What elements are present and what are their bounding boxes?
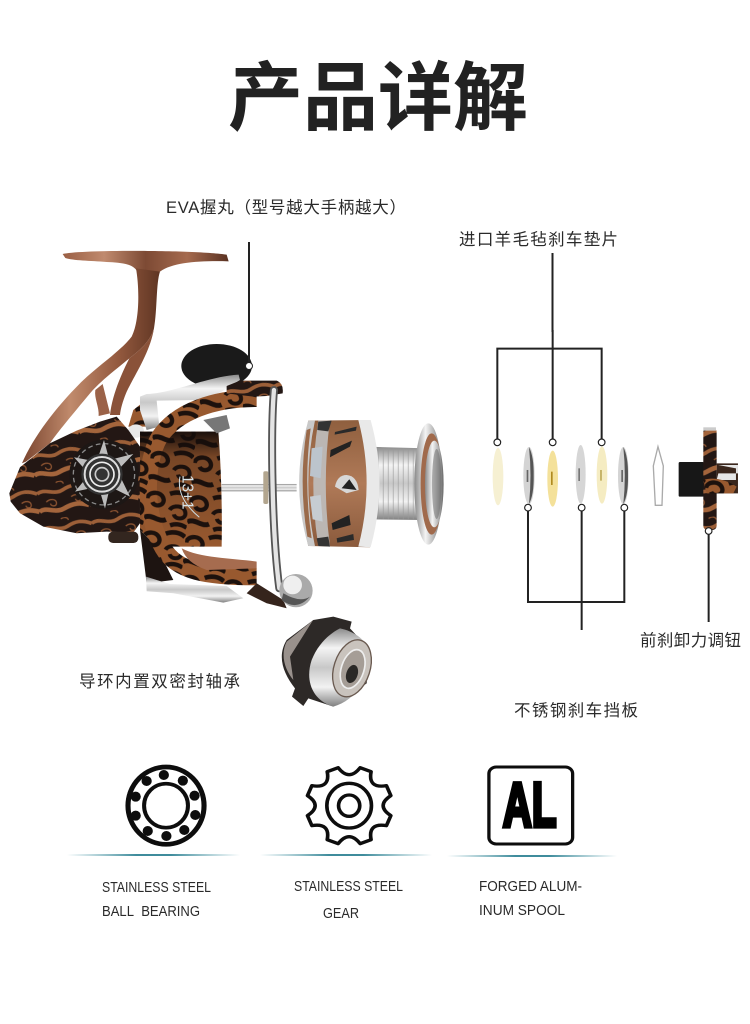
- spool neck: [367, 447, 423, 520]
- divider 3: [447, 855, 617, 857]
- capacity marking: [179, 475, 199, 517]
- caption: ball bearing: STAINLESS STEEL: [102, 879, 211, 896]
- rotor arm patterned: [148, 398, 257, 577]
- steel washer 3: [618, 447, 629, 504]
- caption: gear: [294, 878, 403, 922]
- slot: [337, 534, 354, 543]
- fishing reel illustration: [9, 251, 444, 608]
- rotor arm silver bottom: [146, 577, 243, 603]
- bearing race: [309, 628, 371, 707]
- divider 2: [260, 854, 432, 856]
- reel stem and outer arm: [22, 268, 160, 463]
- bearing close-up: [282, 617, 378, 707]
- flange dark core: [432, 449, 441, 519]
- silver right shoulder: [358, 420, 379, 547]
- felt pad 3: [597, 446, 607, 504]
- caption: gear: GEAR: [323, 905, 359, 922]
- label: EVA grip: EVA握丸（型号越大手柄越大）: [166, 198, 406, 217]
- label: drag knob: 前刹卸力调钮: [640, 631, 741, 650]
- caption: ball bearing: BALL BEARING: [102, 903, 200, 920]
- label: wool felt brake pad: 进口羊毛毡刹车垫片: [459, 230, 618, 249]
- bail roller ball: [279, 574, 313, 607]
- bottom screw: [108, 532, 138, 543]
- icon: gear: [307, 768, 391, 844]
- caption: gear: STAINLESS STEEL: [294, 878, 403, 895]
- slot: [330, 441, 352, 457]
- bearing hole: [344, 663, 360, 685]
- flange outer: [414, 423, 442, 545]
- spring clip: [653, 447, 663, 505]
- brake washers and drag knob: [493, 330, 738, 630]
- felt pad 1: [493, 448, 503, 505]
- caption: spool: INUM SPOOL: [479, 902, 565, 919]
- grip knob: [181, 344, 252, 388]
- slot: [332, 515, 351, 530]
- main shaft: [222, 484, 297, 491]
- cup shadow: [140, 432, 222, 547]
- caption: spool: [479, 878, 582, 919]
- leader line: felt pad top: [552, 253, 554, 332]
- silver rim left: [299, 421, 315, 546]
- reel body: [9, 417, 140, 533]
- icon: aluminium: [489, 767, 573, 844]
- divider 1: [67, 854, 240, 856]
- bronze band under rim: [303, 428, 312, 538]
- top notch: [317, 421, 332, 431]
- neck ribs: [378, 448, 413, 519]
- leader line: EVA grip: [246, 242, 252, 370]
- rotor cup: [140, 432, 222, 547]
- bearing face: [326, 635, 378, 702]
- spool clip: [335, 475, 359, 493]
- drag knob: [679, 427, 738, 530]
- shaft washer: [263, 471, 268, 504]
- small leg: [95, 384, 110, 416]
- inner branch: [110, 328, 154, 415]
- bottom notch: [317, 537, 330, 547]
- clip centre: [342, 479, 357, 490]
- title: 产品详解: [228, 56, 528, 140]
- reel foot plate: [63, 251, 229, 272]
- label: stainless brake plates: 不锈钢刹车挡板: [514, 701, 638, 720]
- lower copper inner: [182, 548, 257, 570]
- bail base: [247, 583, 287, 608]
- back arm: [128, 403, 157, 427]
- bracket: felt pads: [497, 330, 602, 442]
- bracket: steel washers: [528, 508, 624, 630]
- flange bronze ring: [421, 433, 443, 535]
- bail wire: [272, 390, 279, 588]
- small bolt: [203, 415, 230, 433]
- bearing inner ring: [336, 646, 370, 692]
- rotor arm silver top: [140, 375, 240, 430]
- silver band: [313, 421, 330, 546]
- side window lower: [310, 495, 323, 522]
- slot: [335, 427, 357, 435]
- icon: aluminium: AL: [503, 769, 557, 840]
- icon: ball bearing: [128, 767, 204, 844]
- bail mount top: [227, 381, 283, 397]
- bearing housing: [282, 617, 370, 707]
- caption: ball bearing: [102, 879, 211, 920]
- steel washer 1: [523, 447, 535, 504]
- steel washer 2: [576, 445, 586, 504]
- side window upper: [310, 447, 323, 478]
- connector dots: [494, 439, 712, 534]
- caption: spool: FORGED ALUM-: [479, 878, 582, 895]
- white ball: [128, 424, 144, 438]
- spool drum: [301, 420, 377, 547]
- bail wire highlight: [272, 390, 279, 588]
- leader: drag knob: [706, 531, 712, 622]
- felt pad 2: [547, 451, 558, 507]
- spool: [299, 420, 444, 547]
- housing highlight: [284, 621, 313, 680]
- left dark block: [140, 530, 173, 583]
- label: line roller bearing: 导环内置双密封轴承: [79, 672, 240, 691]
- side cap: [69, 440, 139, 509]
- flange inner: [425, 441, 444, 527]
- capacity marking: 13+1: [179, 475, 196, 510]
